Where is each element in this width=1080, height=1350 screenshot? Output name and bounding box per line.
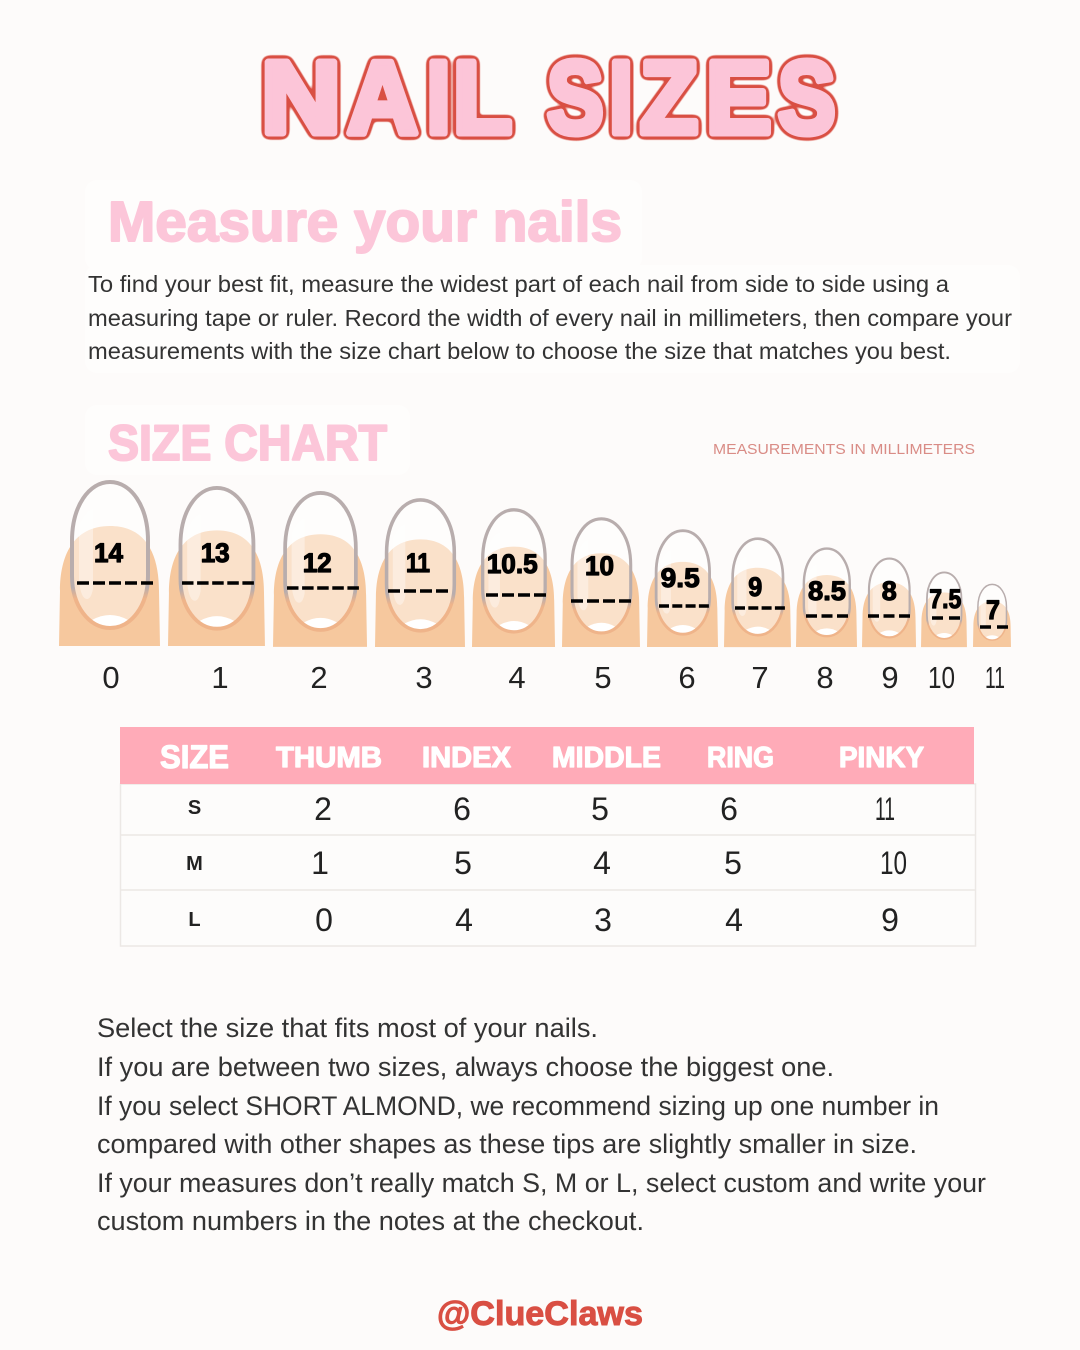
nail size 14 (59, 482, 160, 646)
nail size 8.5: 8.5 (808, 576, 846, 606)
table row M: 1 (311, 845, 329, 881)
text block: sizing advice: If your measures don’t really match S, M or L, select custom and write your (97, 1168, 986, 1198)
nail size 7.5: 7.5 (929, 584, 961, 614)
title: Z (640, 40, 698, 155)
table row M (186, 845, 907, 881)
table row S: S (188, 797, 201, 819)
nail size 10 (562, 519, 640, 647)
size index numbers: 5 (594, 660, 612, 695)
table row M: 5 (454, 845, 472, 881)
size index numbers: 1 (211, 660, 229, 695)
chart: nail size illustrations (59, 482, 1011, 647)
table row S (188, 791, 895, 827)
table row S: 2 (314, 791, 332, 827)
table row L (188, 902, 899, 938)
text block: sizing advice: compared with other shapes as these tips are slightly smaller in size. (97, 1129, 917, 1159)
size index numbers: 4 (508, 660, 526, 695)
nail size 8.5 (796, 549, 857, 647)
heading: size chart: SIZE CHART (108, 415, 387, 471)
table header: SIZE (160, 739, 229, 775)
size index numbers: 9 (881, 660, 899, 695)
nail size 12: 12 (303, 548, 332, 578)
title: I (426, 40, 450, 155)
nail size 12 (273, 493, 367, 647)
size index numbers: 11 (985, 660, 1005, 695)
nail size 13 (168, 488, 265, 646)
table row M: 5 (724, 845, 742, 881)
table row L: 3 (594, 902, 612, 938)
text block: measuring instructions (88, 271, 1012, 364)
text block: measuring instructions: measurements with the size chart below to choose the size that matches you best. (88, 338, 951, 364)
table row S: 6 (453, 791, 471, 827)
table header: INDEX (422, 742, 512, 774)
text block: sizing advice: Select the size that fits most of your nails. (97, 1013, 598, 1043)
nail size 7 (973, 584, 1011, 647)
table row S: 11 (875, 791, 895, 827)
nail size 14: 14 (94, 538, 123, 568)
table header: MIDDLE (552, 742, 661, 774)
title: L (453, 40, 512, 155)
table row L: 0 (315, 902, 333, 938)
panel: size table (120, 727, 976, 946)
nail size 9.5: 9.5 (661, 563, 700, 593)
panel: measure your nails (85, 180, 1020, 373)
table row M: M (186, 853, 203, 875)
text block: measuring instructions: To find your best fit, measure the widest part of each nail from side to side using a (88, 271, 950, 297)
nail size 13: 13 (201, 538, 230, 568)
title: S (547, 40, 604, 155)
table header: PINKY (839, 742, 924, 774)
table row S: 6 (720, 791, 738, 827)
size index numbers: 7 (751, 660, 769, 695)
table row S: 5 (591, 791, 609, 827)
title: E (706, 40, 772, 155)
table row L: 9 (881, 902, 899, 938)
text block: sizing advice: custom numbers in the notes at the checkout. (97, 1206, 644, 1236)
table header: RING (707, 742, 774, 774)
title: S (778, 40, 836, 155)
size index numbers: 3 (415, 660, 433, 695)
table header (120, 727, 974, 784)
nail size 9: 9 (748, 572, 762, 602)
table row L: 4 (725, 902, 743, 938)
size index numbers (102, 660, 1005, 695)
panel: size chart heading (85, 405, 410, 475)
size index numbers: 0 (102, 660, 120, 695)
title: I (609, 40, 633, 155)
nail size 9.5 (647, 531, 718, 647)
table row M: 10 (880, 845, 907, 881)
text block: sizing advice (97, 1013, 986, 1236)
nail size 8 (862, 559, 916, 647)
nail size 10.5: 10.5 (487, 549, 538, 579)
nail size 7.5 (921, 572, 967, 647)
table header: THUMB (276, 742, 382, 774)
nail size 8: 8 (882, 576, 897, 606)
nail size 9 (724, 539, 791, 647)
text block: measuring instructions: measuring tape or ruler. Record the width of every nail in millimeters, then compare your (88, 305, 1012, 331)
nail size 10.5 (472, 510, 555, 647)
title: N (261, 40, 341, 155)
note: measurements in millimeters: MEASUREMENTS IN MILLIMETERS (713, 442, 975, 458)
size index numbers: 6 (678, 660, 696, 695)
text block: sizing advice: If you select SHORT ALMOND, we recommend sizing up one number in (97, 1091, 939, 1121)
nail size 7: 7 (986, 595, 1000, 625)
heading: measure your nails: Measure your nails (108, 190, 622, 254)
table row M: 4 (593, 845, 611, 881)
size index numbers: 10 (928, 660, 955, 695)
size index numbers: 2 (310, 660, 328, 695)
size index numbers: 8 (816, 660, 834, 695)
nail size 11 (375, 500, 465, 647)
nail size 11: 11 (406, 548, 430, 578)
handle: @ClueClaws: @ClueClaws (437, 1295, 643, 1333)
table row L: L (188, 909, 201, 931)
table row L: 4 (455, 902, 473, 938)
title: A (347, 40, 418, 155)
nail size 10: 10 (585, 551, 614, 581)
text block: sizing advice: If you are between two sizes, always choose the biggest one. (97, 1052, 834, 1082)
